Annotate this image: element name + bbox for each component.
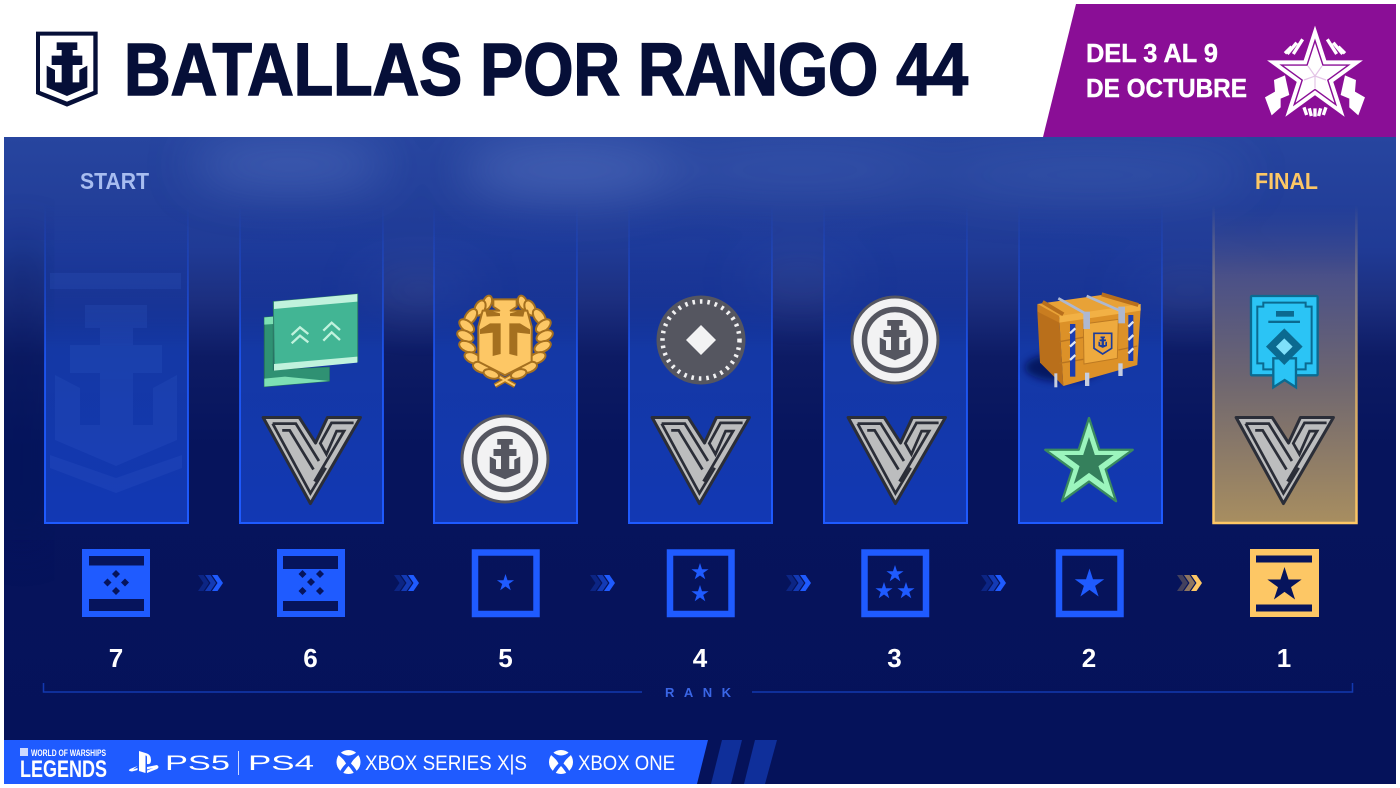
- icon: green star: [1045, 418, 1133, 501]
- icon: blue certificate: [1251, 296, 1318, 387]
- platform: PS4: PS4: [248, 752, 315, 775]
- icon: anchor coin: [852, 297, 938, 383]
- icon: wooden crate: [1025, 294, 1141, 387]
- icon: anchor coin: [462, 416, 548, 502]
- arrow 7 to 6: [198, 575, 223, 591]
- column: rank 6: [240, 205, 383, 523]
- icon: V badge: [1236, 417, 1333, 504]
- rank icon 2: [1059, 552, 1120, 614]
- rank axis: [44, 683, 1352, 700]
- platform: PS5: PS5: [165, 752, 230, 775]
- rank icon 6: [277, 549, 345, 617]
- watermark shield: [50, 273, 182, 493]
- icon: xbox logo: [549, 750, 573, 774]
- icon: gold laurel medal: [455, 294, 555, 386]
- icon: diamond coin: [656, 296, 746, 384]
- rank numbers: 1: [1277, 643, 1291, 673]
- game logo: [20, 748, 107, 783]
- icon: star emblem: [1265, 32, 1365, 117]
- rank numbers: 5: [498, 643, 513, 673]
- title: BATALLAS POR RANGO 44: [124, 28, 968, 111]
- icon: V badge: [263, 417, 360, 504]
- rank numbers: 7: [109, 643, 123, 673]
- rank axis label: RANK: [665, 685, 732, 700]
- rank icon 1: [1250, 549, 1319, 617]
- column: rank 7 start: [45, 205, 188, 523]
- rank icon 7: [82, 549, 150, 617]
- date text: DEL 3 AL 9: [1086, 38, 1218, 68]
- label: start: START: [80, 168, 149, 194]
- arrow 6 to 5: [394, 575, 419, 591]
- icon: xbox logo: [336, 750, 360, 774]
- rank numbers: 6: [303, 643, 318, 673]
- icon: V badge: [652, 417, 749, 504]
- label: final: FINAL: [1255, 168, 1318, 194]
- platform: Xbox One: XBOX ONE: [578, 752, 675, 775]
- game logo shield: [36, 32, 98, 107]
- column: rank 5: [434, 205, 577, 523]
- rank icon 4: [670, 552, 732, 614]
- game logo: LEGENDS: [20, 756, 107, 783]
- column: rank 1 final: [1214, 205, 1356, 523]
- column: rank 2: [1019, 205, 1162, 523]
- icon: V badge: [848, 417, 945, 504]
- game logo: WORLD OF WARSHIPS: [31, 748, 106, 758]
- icon: green flag: [264, 294, 358, 387]
- column: rank 3: [824, 205, 967, 523]
- date text: [1086, 38, 1247, 103]
- footer platform bar: [4, 740, 708, 784]
- arrow 4 to 3: [786, 575, 811, 591]
- icon: playstation logo: [129, 751, 158, 773]
- arrow 5 to 4: [590, 575, 615, 591]
- platform: Xbox Series: XBOX SERIES X|S: [365, 752, 527, 775]
- footer decor stripes: [711, 740, 777, 784]
- date banner: [1043, 4, 1396, 137]
- date text: DE OCTUBRE: [1086, 73, 1247, 103]
- rank icon 5: [475, 552, 536, 614]
- rank numbers: 3: [887, 643, 902, 673]
- arrow 2 to 1: [1177, 575, 1202, 591]
- arrow 3 to 2: [981, 575, 1006, 591]
- column: rank 4: [629, 205, 772, 523]
- rank icon 3: [864, 552, 926, 614]
- rank numbers: [109, 643, 1291, 673]
- rank numbers: 2: [1082, 643, 1096, 673]
- rank numbers: 4: [693, 643, 708, 673]
